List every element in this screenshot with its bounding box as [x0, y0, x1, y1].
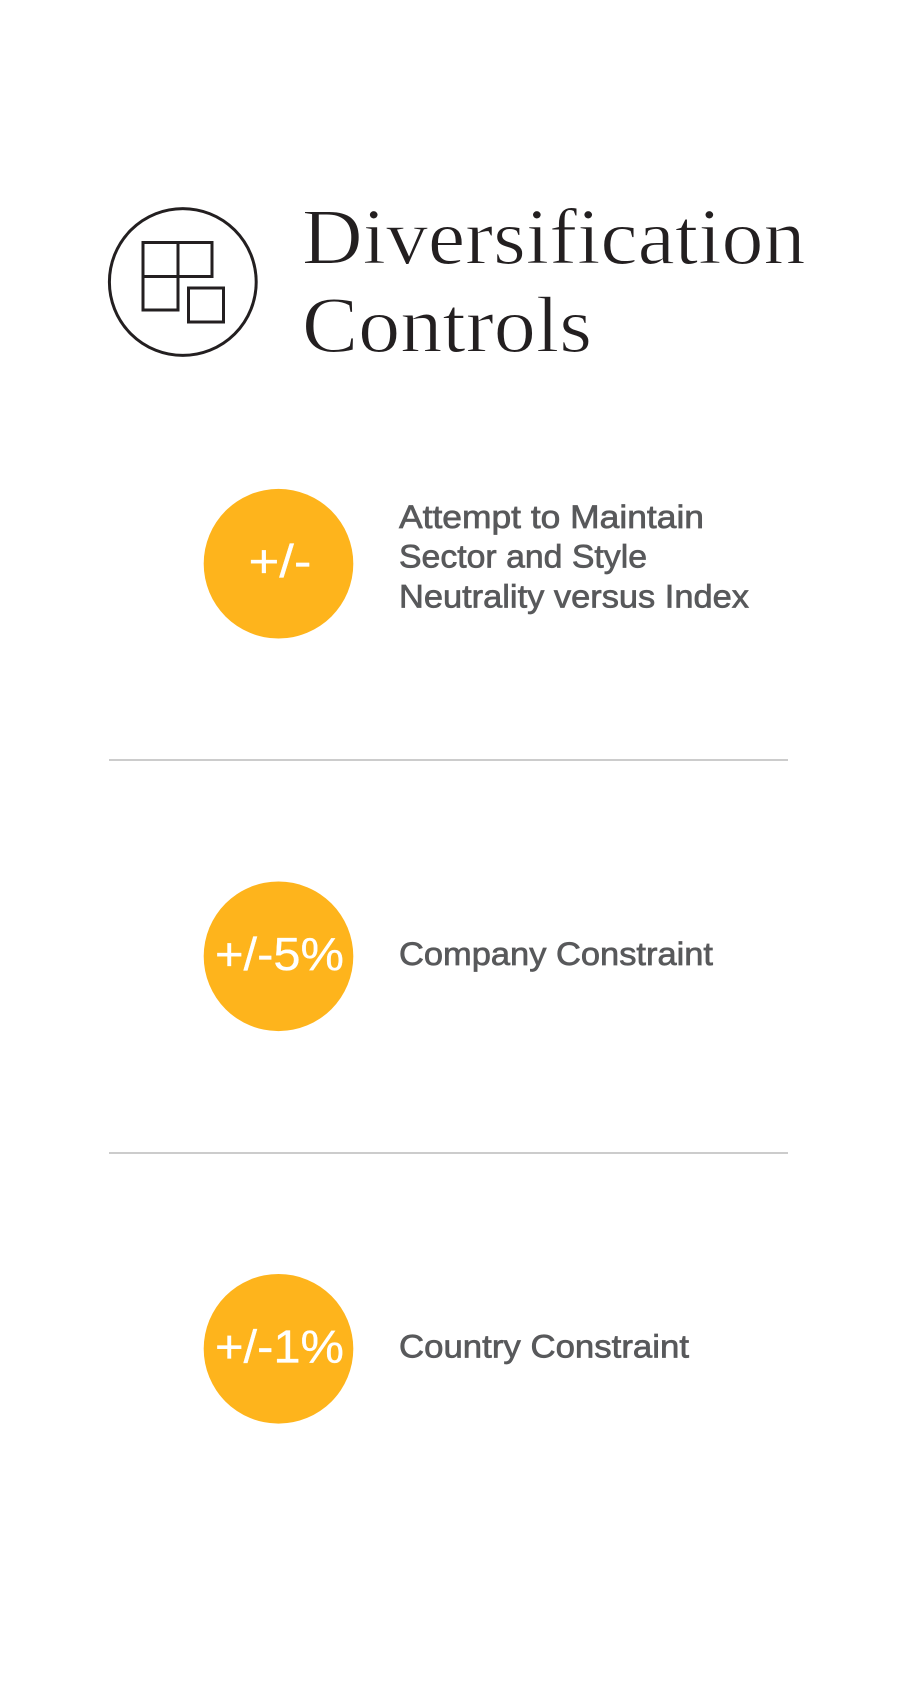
- title: [302, 194, 806, 370]
- text: company constraint: Company Constraint: [399, 936, 713, 972]
- text: attempt to maintain neutrality: Neutrality versus Index: [399, 578, 749, 614]
- badge: +/-: [204, 489, 353, 638]
- text: attempt to maintain neutrality: Attempt to Maintain: [399, 499, 704, 535]
- badge: +/-1%: +/-1%: [215, 1320, 344, 1372]
- title: Diversification: [302, 194, 806, 282]
- badge: +/-: +/-: [248, 535, 312, 587]
- title: Controls: [302, 282, 592, 370]
- badge: +/-5%: [204, 882, 353, 1031]
- icon: squares in a circle: [109, 209, 256, 355]
- item: country constraint: [204, 1274, 689, 1424]
- item: company constraint: [204, 882, 713, 1031]
- badge: +/-1%: [204, 1274, 353, 1424]
- badge: +/-5%: +/-5%: [215, 928, 344, 980]
- text: attempt to maintain neutrality: Sector and Style: [399, 539, 647, 575]
- text: attempt to maintain neutrality: [399, 499, 749, 614]
- item: sector and style neutrality: [204, 489, 749, 638]
- text: country constraint: Country Constraint: [399, 1329, 689, 1365]
